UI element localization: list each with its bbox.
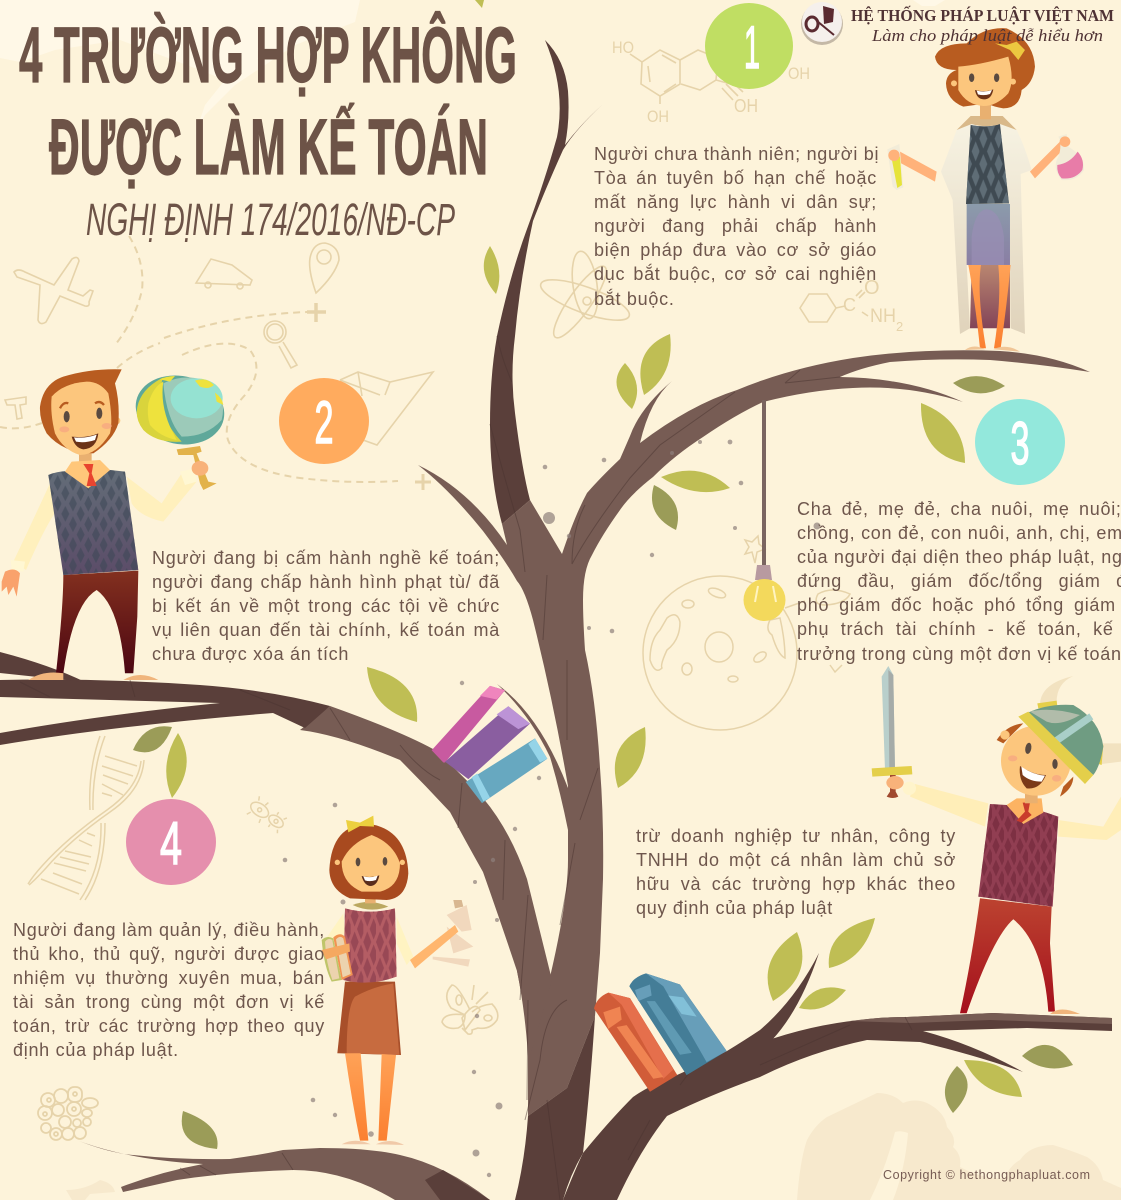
background line art: chemistry doodles: C	[843, 295, 856, 315]
number circle 3	[975, 399, 1065, 485]
text block 2: vụ liên quan đến tài chính, kế toán mà	[152, 620, 500, 640]
text block 4: định của pháp luật.	[13, 1040, 179, 1060]
text block 4	[13, 920, 325, 1060]
background line art: chemistry doodles: OH	[647, 107, 669, 126]
background line art: butterfly	[442, 985, 498, 1034]
text block 3: trưởng trong cùng một đơn vị kế toán	[797, 644, 1121, 664]
text block 4: toán, trừ các trường hợp theo quy	[13, 1016, 325, 1036]
number circle 4	[126, 799, 216, 885]
number circle 3: 3	[1010, 410, 1030, 477]
background line art: bacterium	[245, 795, 289, 835]
text block 3	[797, 499, 1121, 664]
text block 1: biện pháp đưa vào cơ sở giáo	[594, 240, 877, 260]
background smoke silhouette	[66, 1093, 1121, 1200]
text block 5: quy định của pháp luật	[636, 898, 833, 918]
number circle 1	[705, 3, 793, 89]
text block 5: trừ doanh nghiệp tư nhân, công ty	[636, 826, 956, 846]
hanging light bulb	[744, 400, 786, 621]
title: ĐƯỢC LÀM KẾ TOÁN	[49, 102, 488, 191]
background line art: moon	[643, 536, 850, 730]
character: girl with books	[322, 816, 473, 1145]
background line art: chemistry doodles: OH	[734, 96, 758, 116]
text block 1: mất năng lực hành vi dân sự;	[594, 192, 877, 212]
tree: lower right bough	[563, 953, 1112, 1200]
text block 2: Người đang bị cấm hành nghề kế toán;	[152, 548, 500, 568]
number circle 2: 2	[314, 389, 334, 456]
tree: left bough dark part	[0, 680, 330, 745]
background line art: travel doodles	[0, 236, 433, 490]
background cloud	[0, 0, 945, 135]
title: 4 TRƯỜNG HỢP KHÔNG	[19, 10, 517, 99]
text block 1: bắt buộc.	[594, 289, 675, 309]
tree: bottom left dark patch	[425, 1170, 490, 1200]
text block 4: nhiệm vụ thường xuyên mua, bán	[13, 968, 325, 988]
subtitle: NGHỊ ĐỊNH 174/2016/NĐ-CP	[86, 194, 455, 245]
text block 1: Người chưa thành niên; người bị	[594, 144, 879, 164]
tree: bottom left branch	[79, 1141, 490, 1200]
site name: HỆ THỐNG PHÁP LUẬT VIỆT NAM	[851, 5, 1114, 25]
text block 4: Người đang làm quản lý, điều hành,	[13, 920, 325, 940]
character: boy with globe	[2, 367, 231, 680]
text block 5: TNHH do một cá nhân làm chủ sở	[636, 850, 956, 870]
book stack bottom: red and blue	[594, 973, 727, 1092]
text block 1	[594, 144, 879, 309]
background line art: chemistry doodles	[536, 38, 903, 344]
text block 3: chồng, con đẻ, con nuôi, anh, chị, em	[797, 523, 1121, 543]
tree: upper left bough	[490, 40, 602, 524]
text block 1: Tòa án tuyên bố hạn chế hoặc	[594, 168, 877, 188]
text block 4: tài sản trong cùng một đơn vị kế	[13, 992, 325, 1012]
text block 2	[152, 548, 500, 664]
copyright: Copyright © hethongphapluat.com	[883, 1168, 1090, 1182]
tree: far-left thin branch	[0, 652, 85, 682]
site slogan: Làm cho pháp luật dễ hiểu hơn	[871, 26, 1103, 45]
background line art: DNA	[28, 736, 144, 900]
background line art: flower cluster	[38, 1087, 98, 1140]
character: viking boy	[872, 666, 1121, 1014]
text block 2: người đang chấp hành hình phạt tù/ đã	[152, 572, 500, 592]
tree veins	[20, 336, 912, 1200]
tree: book twig	[497, 684, 568, 830]
title	[19, 10, 517, 191]
text block 1: dục bắt buộc, cơ sở cai nghiện	[594, 264, 877, 284]
number circle 4: 4	[160, 810, 182, 877]
tree: right bough and trunk	[418, 350, 1090, 1116]
number circle 2	[279, 378, 369, 464]
text block 1: người đang phải chấp hành	[594, 216, 877, 236]
text block 5: hữu và các trường hợp khác theo	[636, 874, 956, 894]
text block 4: thủ kho, thủ quỹ, người được giao	[13, 944, 325, 964]
background line art: chemistry doodles: 2	[896, 319, 903, 334]
text block 5	[636, 826, 956, 918]
logo emblem	[801, 2, 843, 45]
specks	[283, 440, 820, 1177]
number circle 1: 1	[744, 14, 760, 81]
text block 2: chưa được xóa án tích	[152, 644, 349, 664]
tree: left bough light part	[300, 706, 552, 1056]
tree: highlight on lower right bough	[850, 1013, 1112, 1024]
background line art: chemistry doodles: NH	[870, 306, 896, 327]
background line art: chemistry doodles: OH	[788, 64, 810, 83]
tree: lower trunk	[515, 1016, 595, 1200]
text block 2: bị kết án về một trong các tội về chức	[152, 596, 500, 616]
background line art: chemistry doodles: O	[864, 277, 880, 299]
background line art: chemistry doodles: HO	[612, 38, 634, 57]
book stack top: pink, purple, blue	[432, 686, 547, 803]
character: scientist girl	[887, 28, 1084, 352]
